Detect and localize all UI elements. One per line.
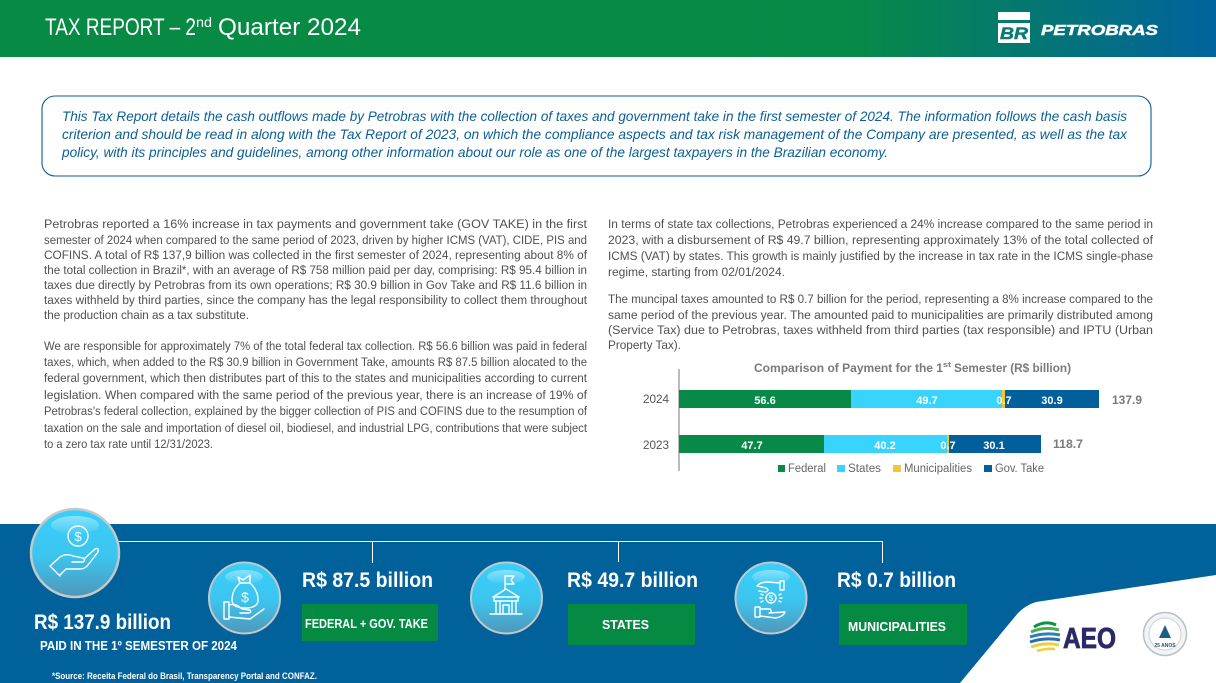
chart title <box>754 360 1071 375</box>
text block: right column: In terms of state tax collections, Petrobras experienced a 24% increase compared to the same period in <box>608 217 1153 231</box>
callout: intro statement: policy, with its principles and guidelines, among other information about our role as one of the largest taxpayers in the Brazilian economy. <box>61 145 888 160</box>
icon: hands exchanging money: $ <box>769 594 774 603</box>
federal value <box>302 569 438 641</box>
text block: left column: taxation on the sale and importation of diesel oil, biodiesel, and industrial LPG, contributions that were subject <box>44 421 588 435</box>
text block: left column: semester of 2024 when compared to the same period of 2023, driven by higher ICMS (VAT), CIDE, PIS and <box>44 233 587 247</box>
icon: hands exchanging money <box>736 562 806 634</box>
chart title: Semester (R$ billion) <box>954 361 1071 375</box>
icon: hand with coin: $ <box>74 529 82 544</box>
bar chart: comparison of payment <box>643 360 1142 475</box>
callout: intro statement: criterion and should be read in along with the Tax Report of 2023, on which the compliance aspects and tax risk management of the Company are presented, as well as the tax <box>62 127 1128 142</box>
text block: right column: same period of the previous year. The amounted paid to municipalities are primarily distributed among <box>608 308 1153 322</box>
text block: left column: COFINS. A total of R$ 137,9 billion was collected in the first semester of 2024, representing about 8% of <box>44 248 588 262</box>
icon: government building <box>471 562 542 634</box>
text block: right column: The muncipal taxes amounted to R$ 0.7 billion for the period, representing a 8% increase compared to the <box>608 292 1153 306</box>
legend: Municipalities <box>904 463 972 475</box>
text block: left column: the production chain as a tax substitute. <box>44 308 249 322</box>
title <box>45 14 361 41</box>
legend: Gov. Take <box>995 463 1044 475</box>
bar: 2024: 49.7 <box>916 395 938 407</box>
callout: intro statement: This Tax Report details the cash outflows made by Petrobras with the collection of taxes and government take in the first semester of 2024. The information follows the cash basis <box>62 109 1127 124</box>
chart title: st <box>943 360 952 369</box>
total value <box>34 611 237 653</box>
federal value: R$ 87.5 billion <box>302 569 433 592</box>
seal: transparency award: 25 ANOS <box>1154 643 1176 649</box>
legend: States <box>848 463 881 475</box>
header band <box>0 0 1216 57</box>
text block: right column: 2023, with a disbursement of R$ 49.7 billion, representing approximately 13% of the total collected of <box>608 233 1154 247</box>
white corner shape <box>960 575 1216 683</box>
icon: money bag <box>209 562 280 634</box>
title: Quarter 2024 <box>218 14 361 41</box>
text block: left column: taxes due directly by Petrobras from its own operations; R$ 30.9 billion in Gov Take and R$ 11.6 billion in <box>44 278 587 292</box>
text block: left column <box>44 217 588 451</box>
text block: left column: federal government, which then distributes part of this to the states and municipalities according to current <box>44 371 588 385</box>
federal value: FEDERAL + GOV. TAKE <box>305 617 428 631</box>
bar: 2024: 0.7 <box>996 395 1012 407</box>
chart title: Comparison of Payment for the 1 <box>754 361 943 375</box>
text block: left column: Petrobras reported a 16% increase in tax payments and government take (GOV TAKE) in the first <box>44 217 588 231</box>
icon: hand with coin <box>31 509 119 597</box>
states value: R$ 49.7 billion <box>567 569 698 592</box>
text block: left column: the total collection in Brazil*, with an average of R$ 758 million paid per day, comprising: R$ 95.4 billion in <box>44 263 587 277</box>
text block: left column: taxes withheld by third parties, since the company has the legal responsibility to collect them throughout <box>44 293 588 307</box>
logo: AEO: AEO <box>1063 623 1116 655</box>
bar: 2023 <box>643 435 1083 453</box>
legend <box>778 463 1044 475</box>
text block: left column: to a zero tax rate until 12/31/2023. <box>44 437 213 451</box>
text block: left column: taxes, which, when added to the R$ 30.9 billion in Government Take, amounts R$ 87.5 billion alocated to the <box>44 355 587 369</box>
bar: 2023: 2023 <box>643 438 669 452</box>
bar: 2023: 30.1 <box>983 440 1005 452</box>
states value: STATES <box>602 618 649 632</box>
panel: payments summary footer <box>0 509 1216 683</box>
total value: PAID IN THE 1º SEMESTER OF 2024 <box>40 639 237 653</box>
bar: 2024: 2024 <box>643 392 669 406</box>
logo: AEO <box>1030 622 1116 655</box>
seal: transparency award <box>1144 612 1186 656</box>
bar: 2024: 56.6 <box>754 395 776 407</box>
logo: Petrobras: PETROBRAS <box>1041 22 1158 39</box>
bar: 2024: 137.9 <box>1112 393 1142 407</box>
logo: Petrobras: BR <box>1000 24 1029 43</box>
text block: right column <box>608 217 1154 352</box>
bar: 2024 <box>643 390 1142 408</box>
callout: intro statement <box>42 96 1151 176</box>
text block: right column: (Service Tax) due to Petrobras, taxes withheld from third parties (tax responsible) and IPTU (Urban <box>608 323 1153 337</box>
text block: left column: legislation. When compared with the same period of the previous year, there is an increase of 19% of <box>44 388 588 402</box>
bar: 2024: 30.9 <box>1041 395 1063 407</box>
bar: 2023: 118.7 <box>1053 437 1083 451</box>
logo: Petrobras <box>998 12 1158 43</box>
text block: left column: Petrobras's federal collection, explained by the bigger collection of PIS and COFINS due to the resumption of <box>44 404 588 418</box>
text block: right column: regime, starting from 02/01/2024. <box>608 265 785 279</box>
icon: money bag: $ <box>241 589 249 605</box>
text block: right column: Property Tax). <box>608 338 681 352</box>
bar: 2023: 47.7 <box>741 440 763 452</box>
title: TAX REPORT – 2 <box>45 14 196 41</box>
municipalities value: R$ 0.7 billion <box>837 569 956 592</box>
bar: 2023: 0.7 <box>940 440 956 452</box>
bar: 2023: 40.2 <box>874 440 896 452</box>
text block: right column: ICMS (VAT) by states. This growth is mainly justified by the increase in tax rate in the ICMS single-phase <box>608 249 1153 263</box>
legend: Federal <box>788 463 826 475</box>
text block: left column: We are responsible for approximately 7% of the total federal tax collection. R$ 56.6 billion was paid in federal <box>44 339 587 353</box>
states value <box>567 569 698 645</box>
connector lines <box>118 542 882 563</box>
municipalities value: MUNICIPALITIES <box>848 620 946 634</box>
municipalities value <box>837 569 967 645</box>
title: nd <box>196 14 212 30</box>
total value: R$ 137.9 billion <box>34 611 171 634</box>
source note: *Source: Receita Federal do Brasil, Transparency Portal and CONFAZ. <box>52 671 317 681</box>
